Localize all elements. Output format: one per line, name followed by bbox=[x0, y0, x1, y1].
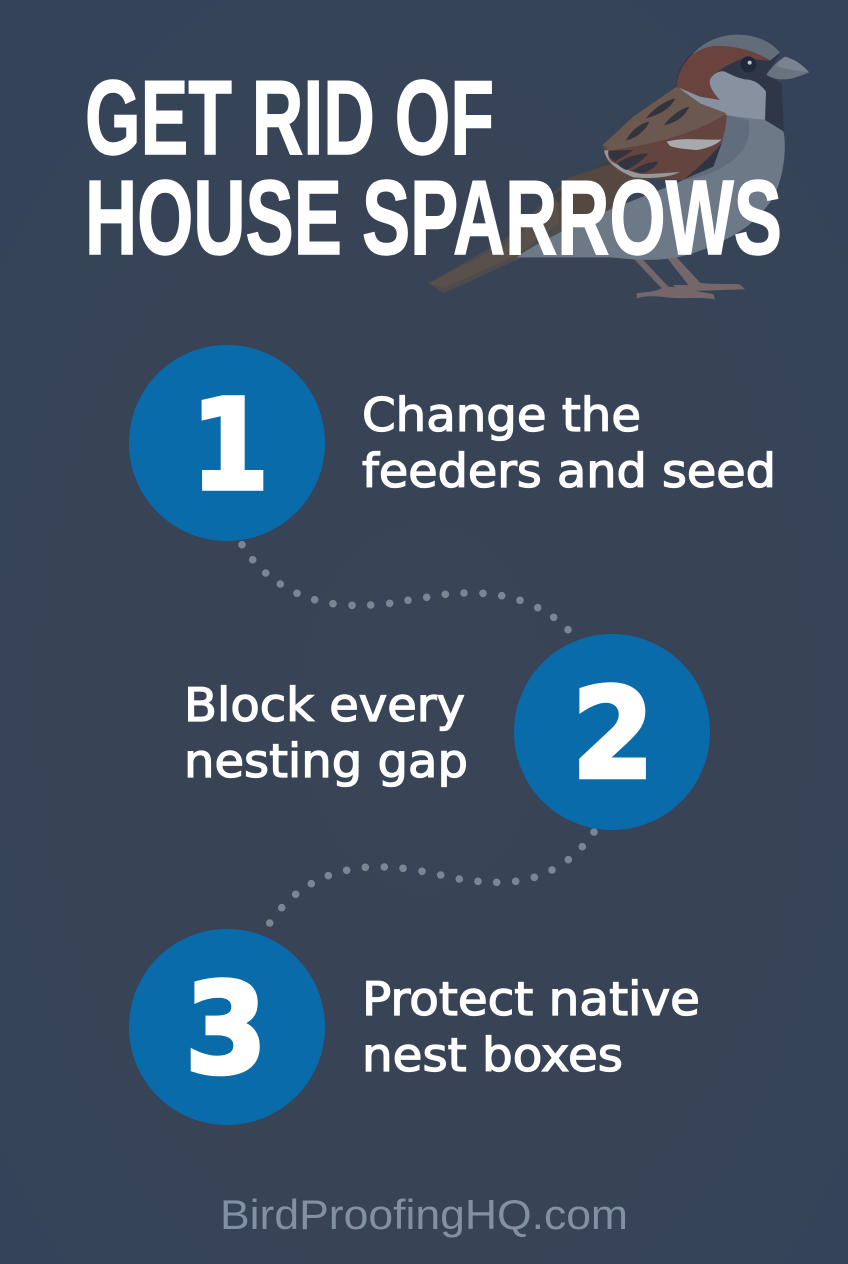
step 3 number badge bbox=[129, 929, 325, 1125]
title bbox=[85, 59, 782, 277]
title line 1: GET RID OF bbox=[85, 59, 494, 177]
step 1 text bbox=[362, 388, 776, 498]
step 2 number badge: 2 bbox=[572, 662, 654, 807]
step 3 text: nest boxes bbox=[362, 1028, 623, 1082]
step 3 number badge: 3 bbox=[185, 957, 267, 1102]
step 2 bbox=[184, 634, 710, 830]
dotted connector: step 1 to step 2 bbox=[238, 541, 572, 634]
step 2 text: Block every bbox=[184, 678, 465, 732]
step 2 number badge bbox=[514, 634, 710, 830]
step 3 text bbox=[362, 972, 700, 1082]
bird head bbox=[676, 35, 809, 132]
step 3 bbox=[129, 929, 700, 1125]
bird legs bbox=[633, 257, 745, 299]
step 1 number badge: 1 bbox=[191, 374, 269, 518]
dotted connector: step 2 to step 3 bbox=[266, 828, 598, 927]
step 2 text: nesting gap bbox=[184, 734, 468, 788]
step 1 text: feeders and seed bbox=[362, 444, 776, 498]
icon: house sparrow illustration bbox=[428, 35, 809, 299]
footer website: BirdProofingHQ.com bbox=[220, 1191, 628, 1238]
step 2 text bbox=[184, 678, 468, 788]
step 1 bbox=[129, 345, 776, 541]
bird wing bbox=[603, 87, 727, 180]
step 1 text: Change the bbox=[362, 388, 641, 442]
bird tail bbox=[428, 160, 653, 293]
step 1 number badge bbox=[129, 345, 325, 541]
bird body bbox=[517, 110, 785, 260]
step 3 text: Protect native bbox=[362, 972, 700, 1026]
bird chest shade bbox=[683, 115, 749, 180]
